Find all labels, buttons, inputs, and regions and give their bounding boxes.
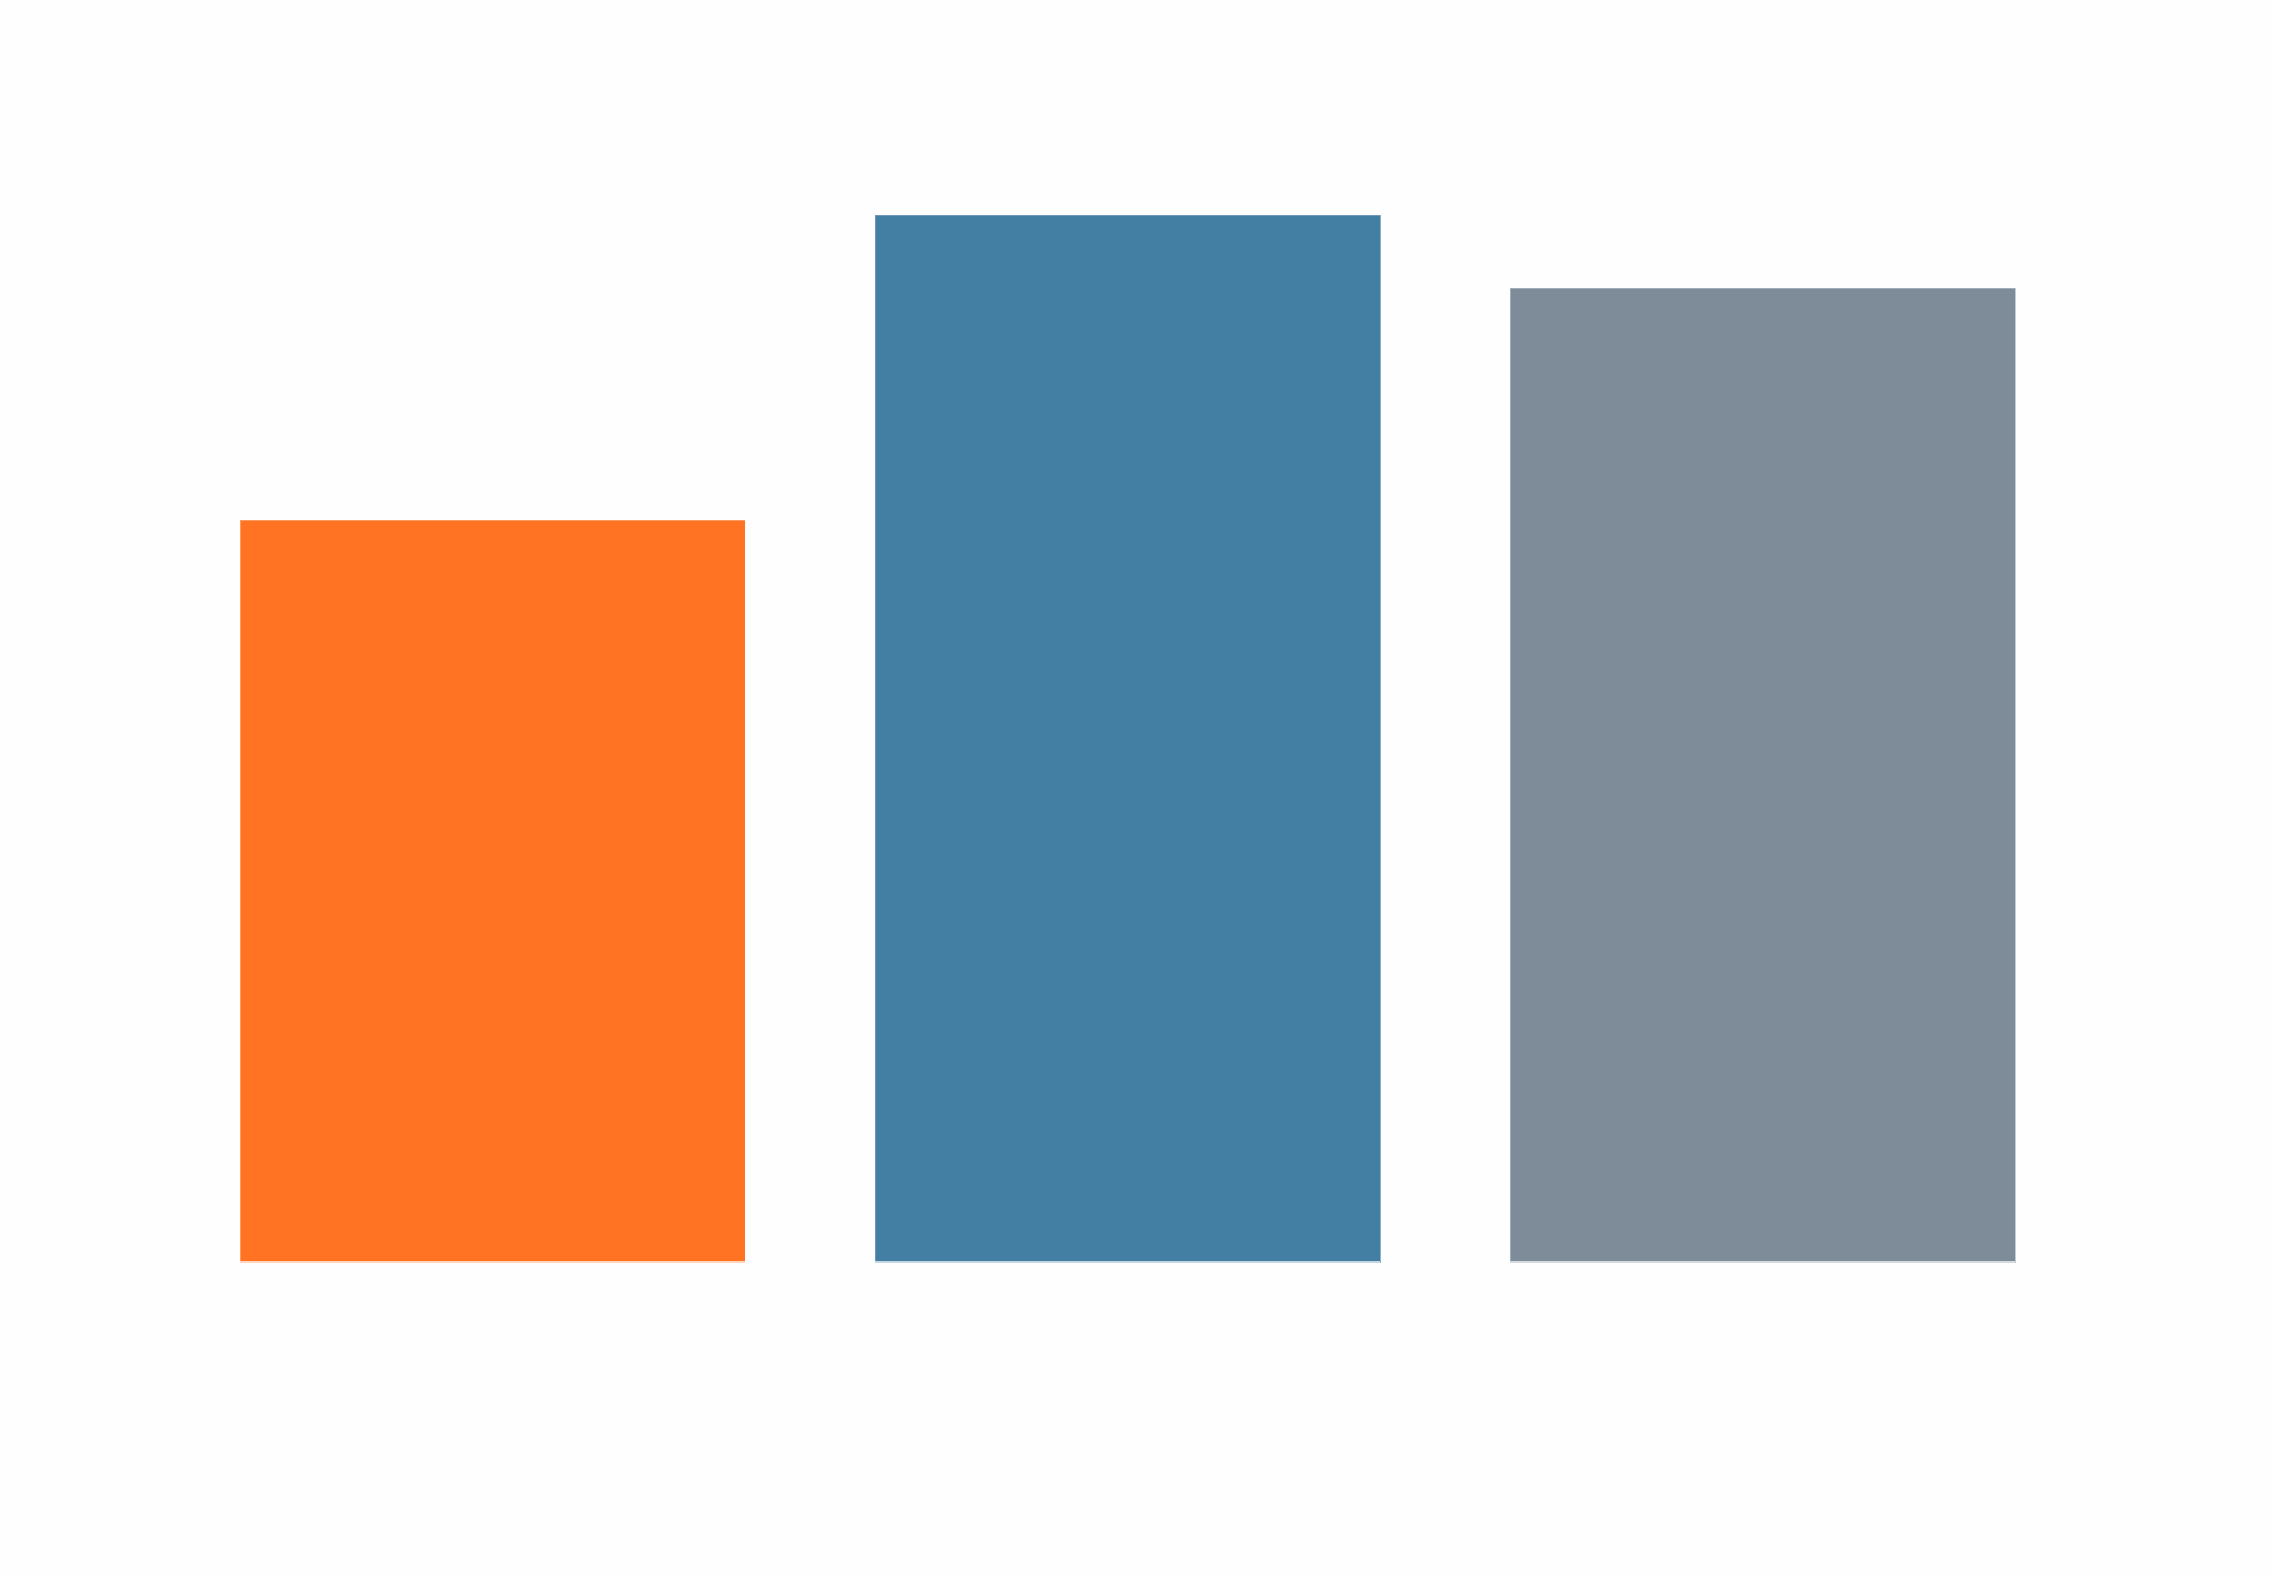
bar: blue: [875, 215, 1381, 1263]
bar: gray: [1510, 288, 2016, 1263]
bar: orange: [240, 520, 745, 1263]
